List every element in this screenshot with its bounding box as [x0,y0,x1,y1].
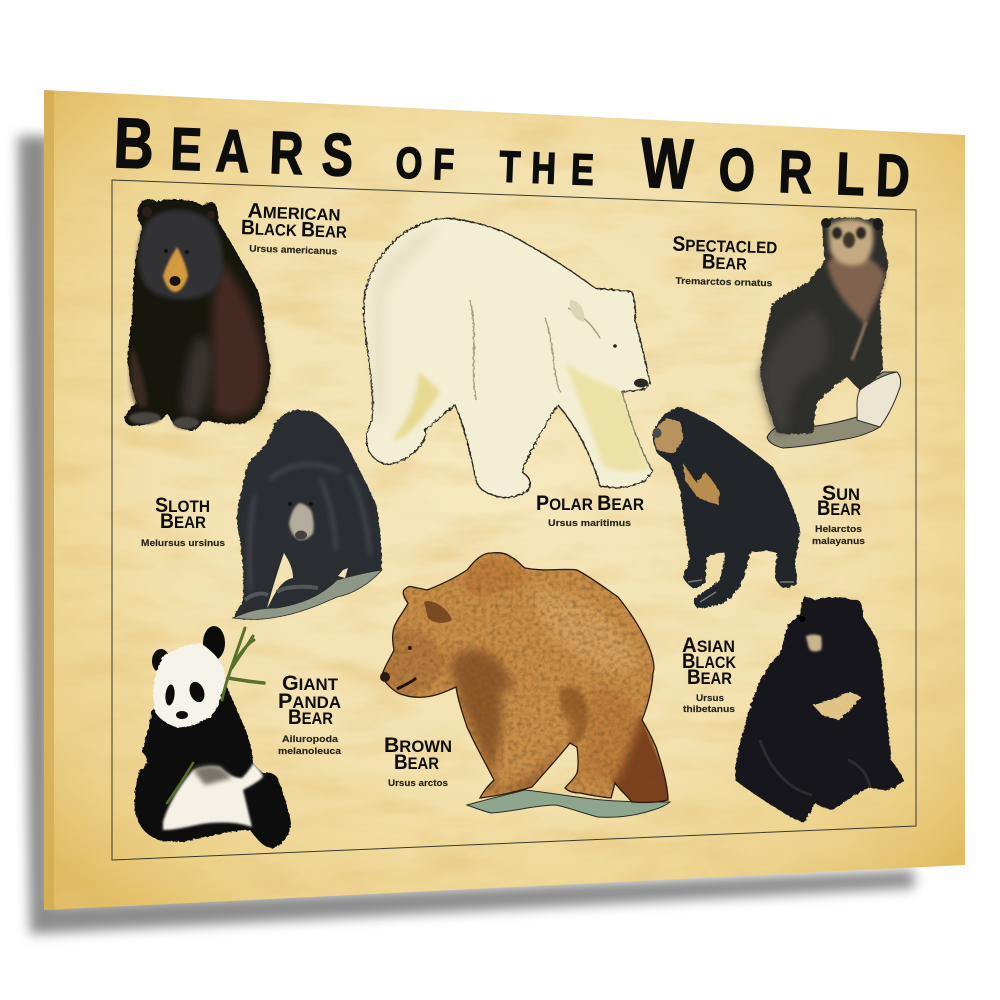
ground under brown bear [467,790,670,817]
label: sloth bear: BEAR [160,510,206,533]
label: giant panda bear: melanoleuca [278,746,342,757]
label: brown bear: Ursus arctos [388,778,448,789]
label: sun bear: BEAR [817,497,861,520]
canvas print [44,90,965,910]
label: sun bear: malayanus [812,536,865,547]
label: american black bear: Ursus americanus [249,243,337,258]
label: polar bear: Ursus maritimus [548,518,631,529]
label: asian black bear: ASIAN [682,634,735,657]
label: asian black bear: Ursus [696,693,724,704]
label: american black bear [240,199,348,258]
title [112,103,911,212]
label: polar bear: POLAR BEAR [536,492,644,515]
label: asian black bear: BLACK [682,650,736,673]
bear: sloth bear [233,410,382,619]
label: giant panda bear: GIANT [282,672,338,695]
title: OF [395,139,455,190]
label: sun bear: SUN [822,482,860,505]
title: THE [498,142,595,195]
bear: spectacled bear [760,217,901,448]
title: EARS [169,116,354,189]
bear: giant panda [135,626,291,848]
label: asian black bear: thibetanus [683,704,735,715]
bear: asian black bear [735,597,904,823]
label: brown bear [384,734,452,789]
label: brown bear: BROWN [384,734,452,757]
label: giant panda bear: Ailuropoda [282,734,339,745]
label: sloth bear: Melursus ursinus [141,538,225,549]
title: ORLD [717,136,911,210]
label: giant panda bear [278,672,342,757]
label: brown bear: BEAR [394,751,439,774]
label: asian black bear: BEAR [687,666,732,689]
label: spectacled bear [671,233,778,289]
bear: polar bear [364,218,652,498]
label: sun bear: Helarctos [815,524,862,535]
bear: american black bear [125,200,270,430]
label: giant panda bear: PANDA [278,690,341,713]
label: sloth bear [141,494,225,549]
label: spectacled bear: Tremarctos ornatus [675,276,773,289]
label: sloth bear: SLOTH [155,494,210,517]
inner frame [112,180,916,860]
label: spectacled bear: SPECTACLED [672,233,778,258]
canvas drop shadow [18,136,914,934]
label: american black bear: AMERICAN [247,199,341,226]
label: american black bear: BLACK BEAR [241,216,347,243]
label: polar bear [536,492,644,529]
label: spectacled bear: BEAR [702,250,747,275]
title: W [639,123,695,204]
label: sun bear [812,482,865,547]
label: asian black bear [682,634,736,715]
title: B [112,103,155,184]
bear: brown bear [375,545,680,817]
bear: sun bear [652,407,800,608]
label: giant panda bear: BEAR [288,706,333,729]
